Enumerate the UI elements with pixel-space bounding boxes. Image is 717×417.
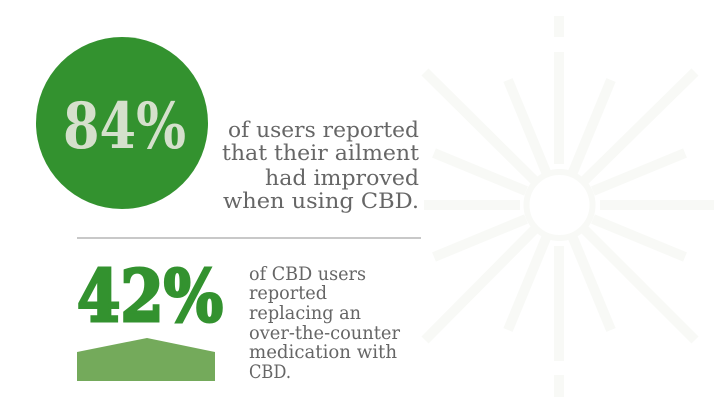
text block: replaced medication: CBD. [249, 361, 291, 383]
stat circle: 84% [36, 37, 208, 209]
stat: 42%: 42% [77, 254, 223, 338]
text block: ailment improved: that their ailment [222, 141, 420, 165]
text block: replaced medication: over-the-counter [249, 322, 401, 344]
text block: replaced medication: of CBD users [249, 263, 366, 285]
text block: replaced medication: replacing an [249, 302, 361, 324]
text block: replaced medication: medication with [249, 341, 397, 363]
icon: sun burst [424, 16, 714, 397]
text block: replaced medication [249, 263, 401, 383]
text block: ailment improved: when using CBD. [223, 189, 419, 213]
text block: ailment improved: of users reported [228, 118, 419, 142]
stat circle: 84%: 84% [63, 89, 186, 164]
icon: green house-shaped bar [77, 338, 215, 381]
text block: replaced medication: reported [249, 282, 327, 304]
text block: ailment improved [222, 118, 420, 213]
text block: ailment improved: had improved [265, 166, 419, 190]
